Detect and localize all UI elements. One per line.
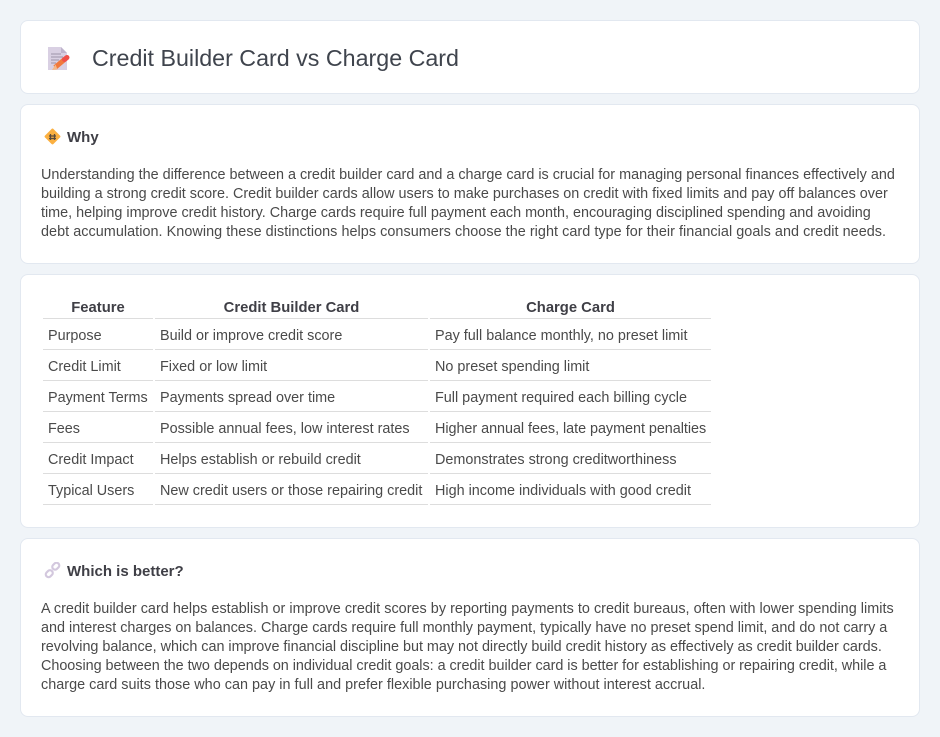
text block: which is better: revolving balance, which can improve financial discipline but may not directly build credit history as effectively as credit builder cards. [41,639,882,655]
table row: credit limit: Credit Limit [48,359,121,375]
table row: payment terms [43,390,711,412]
text block: which is better [41,601,894,693]
text block: why: debt accumulation. Knowing these distinctions helps consumers choose the right card type for their financial goals and credit needs. [41,224,886,240]
table row: purpose: Build or improve credit score [160,328,342,344]
table row: credit impact: Helps establish or rebuild credit [160,452,361,468]
text block: which is better: charge card suits those who can pay in full and prefer flexible purchasing power without interest accrual. [41,677,705,693]
table row: purpose: Pay full balance monthly, no preset limit [435,328,688,344]
table row: credit impact: Demonstrates strong creditworthiness [435,452,677,468]
panel: header [20,20,920,94]
title: Credit Builder Card vs Charge Card [92,45,459,71]
table row: fees: Fees [48,421,80,437]
icon: document with pencil [48,47,70,70]
table row: credit limit: Fixed or low limit [160,359,267,375]
heading: why: Why [67,129,99,146]
text block: why: time, helping improve credit history. Charge cards require full payment each month, encouraging disciplined spending and avoiding [41,205,871,221]
heading: which is better: Which is better? [67,563,184,580]
text block: which is better: Choosing between the two depends on individual credit goals: a credit builder card is better for establishing or repairing credit, while a [41,658,886,674]
table header: Feature [71,300,125,316]
text block: which is better: and interest charges on balances. Charge cards require full monthly payment, typically have no preset spend limit, and do not carry a [41,620,887,636]
table header: Credit Builder Card [224,300,359,316]
text block: why [41,167,895,240]
text block: which is better: A credit builder card helps establish or improve credit scores by reporting payments to credit bureaus, often with lower spending limits [41,601,894,617]
text block: why: building a strong credit score. Credit builder cards allow users to make purchases on credit with fixed limits and pay off balances over [41,186,888,202]
table row: typical users: Typical Users [48,483,134,499]
table row: credit limit [43,359,711,381]
table row: credit limit: No preset spending limit [435,359,589,375]
panel: why [20,104,920,264]
text block: why: Understanding the difference between a credit builder card and a charge card is crucial for managing personal finances effectively and [41,167,895,183]
table header: Charge Card [526,300,615,316]
icon: warning diamond [44,128,60,144]
table row: typical users: High income individuals with good credit [435,483,691,499]
table row: fees [43,421,711,443]
table row: payment terms: Payment Terms [48,390,148,406]
table row: typical users: New credit users or those repairing credit [160,483,422,499]
table row: purpose: Purpose [48,328,102,344]
table row: credit impact [43,452,711,474]
table row: typical users [43,483,711,505]
table header [43,300,711,319]
table row: purpose [43,328,711,350]
panel: which is better [20,538,920,717]
table row: credit impact: Credit Impact [48,452,134,468]
panel: comparison table [20,274,920,528]
table row: fees: Higher annual fees, late payment penalties [435,421,706,437]
icon: chain link [44,562,60,578]
table row: payment terms: Payments spread over time [160,390,335,406]
table row: fees: Possible annual fees, low interest rates [160,421,410,437]
table row: payment terms: Full payment required each billing cycle [435,390,687,406]
